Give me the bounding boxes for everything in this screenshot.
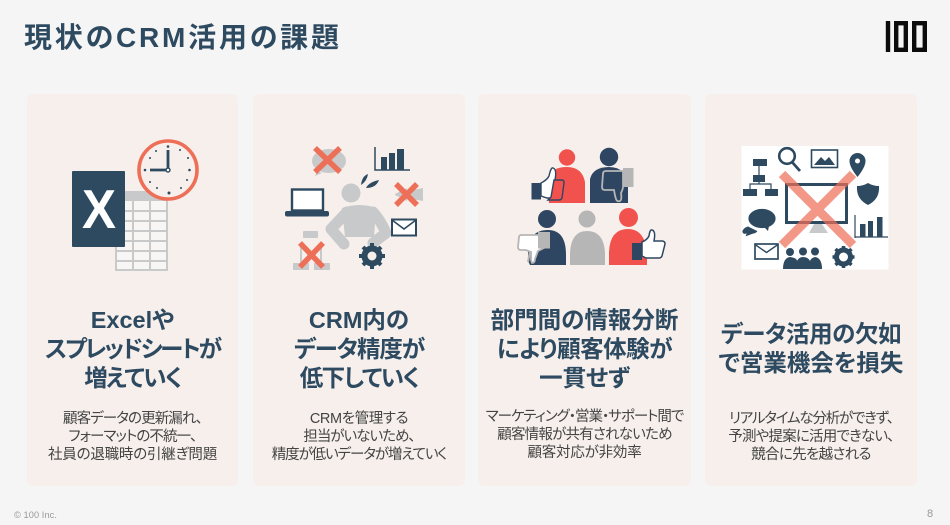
text: CRM description: CRMを管理する bbox=[310, 411, 408, 427]
text: silos description bbox=[486, 408, 684, 461]
heading: lost opportunities: データ活用の欠如 bbox=[721, 321, 901, 347]
icon: Excel and clock bbox=[72, 139, 199, 271]
text: Excel description: フォーマットの不統一、 bbox=[68, 429, 197, 445]
heading: lost opportunities: で営業機会を損失 bbox=[719, 350, 903, 376]
icon: CRM worker with crossed-out tools bbox=[285, 146, 423, 270]
text: CRM description: 精度が低いデータが増えていく bbox=[272, 447, 446, 463]
heading: CRM accuracy: データ精度が bbox=[294, 336, 424, 362]
text: silos description: 顧客対応が非効率 bbox=[527, 445, 642, 461]
panel: lost opportunities bbox=[705, 94, 917, 486]
icon: people with thumbs up and down bbox=[517, 148, 666, 265]
heading: Excel: 増えていく bbox=[84, 365, 181, 391]
text: silos description: マーケティング・営業・サポート間で bbox=[486, 409, 683, 425]
panel: silos bbox=[478, 94, 691, 486]
heading: silos: 一貫せず bbox=[539, 365, 630, 391]
text: lost opportunities description: 競合に先を越される bbox=[751, 447, 871, 463]
icon: data tools crossed out bbox=[742, 146, 888, 270]
text: lost opportunities description: リアルタイムな分析ができず、 bbox=[729, 411, 893, 427]
text: CRM description: 担当がいないため、 bbox=[303, 429, 415, 445]
heading: silos: により顧客体験が bbox=[497, 336, 672, 362]
logo bbox=[886, 21, 927, 52]
heading: CRM accuracy: CRM内の bbox=[309, 307, 409, 333]
title: 現状のCRM活用の課題 bbox=[24, 22, 342, 53]
heading: Excel bbox=[45, 307, 222, 391]
text: Excel description bbox=[48, 410, 217, 463]
footer: copyright: © 100 Inc. bbox=[14, 510, 57, 520]
text: CRM description bbox=[272, 410, 446, 463]
heading: silos: 部門間の情報分断 bbox=[491, 307, 678, 333]
heading: Excel: スプレッドシートが bbox=[45, 336, 220, 362]
text: Excel description: 社員の退職時の引継ぎ問題 bbox=[48, 447, 217, 463]
heading: silos bbox=[491, 307, 678, 391]
heading: lost opportunities bbox=[719, 321, 903, 376]
panel: CRM accuracy bbox=[253, 94, 465, 486]
panel: Excel bbox=[27, 94, 238, 486]
text: Excel description: 顧客データの更新漏れ、 bbox=[63, 411, 202, 427]
footer: page number: 8 bbox=[927, 508, 933, 520]
heading: Excel: Excelや bbox=[91, 307, 174, 333]
text: lost opportunities description bbox=[728, 410, 894, 463]
icon: Excel and clock: X bbox=[82, 178, 116, 240]
heading: CRM accuracy: 低下していく bbox=[300, 365, 418, 391]
text: lost opportunities description: 予測や提案に活用できない、 bbox=[728, 429, 894, 445]
text: silos description: 顧客情報が共有されないため bbox=[497, 427, 672, 443]
heading: CRM accuracy bbox=[294, 307, 425, 391]
